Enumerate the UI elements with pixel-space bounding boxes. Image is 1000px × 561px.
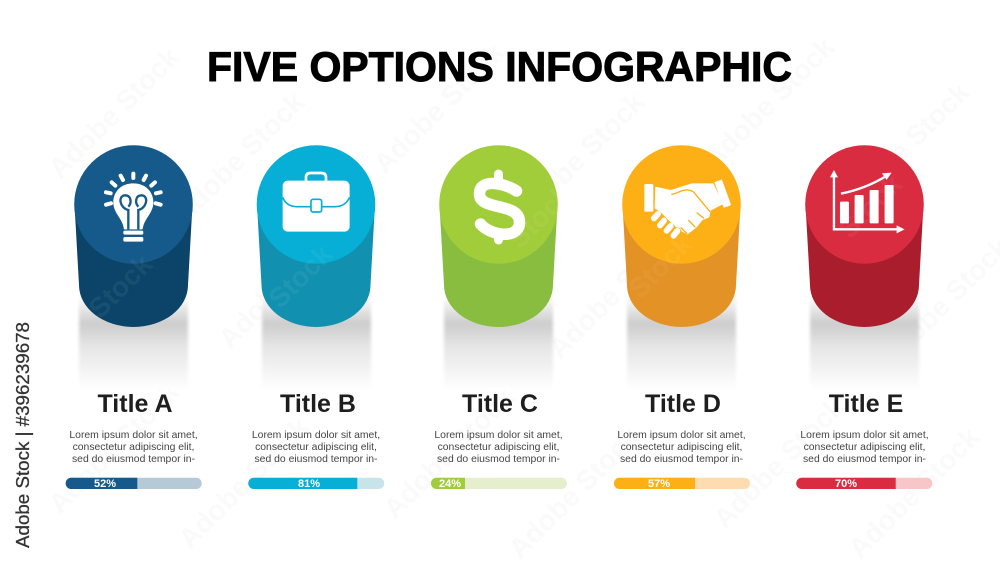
text C: consectetur adipiscing elit, (438, 442, 559, 453)
cylinder B (257, 145, 375, 327)
foreground watermark over cylinders (82, 168, 908, 324)
foreground watermark over cylinders: Stock (262, 238, 338, 314)
progress bar B 81%: 81% (298, 478, 320, 490)
text B: Lorem ipsum dolor sit amet, (252, 430, 380, 441)
progress bar D 57%: 57% (648, 478, 670, 490)
progress bar C 24%: 24% (439, 478, 461, 490)
progress bar B 81% (248, 478, 384, 490)
background watermark pattern: Adobe Stock (507, 86, 651, 229)
progress bar D 57% (614, 478, 750, 490)
progress bar E 70%: 70% (835, 478, 857, 490)
foreground watermark over cylinders: Stock (502, 178, 578, 254)
cylinder shadow E (810, 295, 919, 390)
text D: consectetur adipiscing elit, (621, 442, 742, 453)
background watermark pattern: Adobe Stock (832, 76, 976, 219)
heading C: Title C (462, 390, 538, 418)
cylinder shadow B (262, 295, 371, 390)
foreground watermark over cylinders: Stock (82, 248, 158, 324)
text A: Lorem ipsum dolor sit amet, (69, 430, 198, 441)
option A column (66, 145, 202, 490)
progress bar A 52% (66, 478, 202, 490)
text D: sed do eiusmod tempor in- (620, 454, 743, 465)
icon: growth chart (830, 170, 905, 233)
foreground watermark over cylinders: Stock (622, 228, 698, 304)
option B column (248, 145, 384, 490)
icon: handshake (644, 179, 731, 236)
cylinder C (439, 145, 558, 327)
text C: sed do eiusmod tempor in- (437, 454, 560, 465)
text E: consectetur adipiscing elit, (804, 442, 925, 453)
icon: light bulb (106, 174, 161, 242)
progress bar A 52%: 52% (94, 478, 116, 490)
icon: briefcase (283, 173, 350, 232)
background watermark pattern: Adobe Stock (842, 421, 986, 561)
option C column (431, 145, 567, 490)
background watermark pattern: Adobe Stock (502, 421, 646, 561)
text E: Lorem ipsum dolor sit amet, (800, 430, 929, 441)
text C (434, 430, 563, 465)
background watermark pattern: Adobe Stock (542, 221, 686, 364)
background watermark pattern: Adobe Stock (367, 36, 511, 179)
text B: sed do eiusmod tempor in- (254, 454, 378, 465)
text D (617, 430, 746, 465)
option E column (796, 145, 932, 490)
text D: Lorem ipsum dolor sit amet, (617, 430, 746, 441)
option D column (614, 145, 750, 490)
cylinder shadow D (627, 295, 736, 390)
foreground watermark over cylinders: Stock (832, 168, 908, 244)
text B: consectetur adipiscing elit, (255, 442, 377, 453)
text E: sed do eiusmod tempor in- (803, 454, 926, 465)
cylinder E (805, 145, 924, 327)
text E (800, 430, 929, 465)
background watermark pattern: Adobe Stock (377, 381, 521, 524)
text C: Lorem ipsum dolor sit amet, (434, 430, 563, 441)
heading A: Title A (97, 390, 173, 418)
heading D: Title D (645, 390, 721, 418)
heading E: Title E (829, 390, 903, 418)
background watermark pattern: Adobe Stock (707, 391, 851, 534)
side credit: Adobe Stock number: Adobe Stock | #396239678 (12, 322, 33, 548)
background watermark pattern: Adobe Stock (212, 211, 356, 354)
background watermark pattern: Adobe Stock (42, 376, 186, 519)
text A (69, 430, 198, 465)
background watermark pattern: Adobe Stock (167, 86, 311, 229)
text A: consectetur adipiscing elit, (73, 442, 194, 453)
background watermark pattern: Adobe Stock (697, 31, 841, 174)
background watermark pattern: Adobe Stock (172, 411, 316, 554)
title: FIVE OPTIONS INFOGRAPHIC (207, 43, 792, 90)
cylinder A (74, 145, 193, 327)
progress bar C 24% (431, 478, 567, 490)
heading B: Title B (280, 390, 356, 418)
background watermark pattern: Adobe Stock (42, 41, 186, 184)
cylinder shadow A (79, 295, 188, 390)
text B (252, 430, 380, 465)
text A: sed do eiusmod tempor in- (72, 454, 195, 465)
progress bar E 70% (796, 478, 932, 490)
cylinder D (622, 145, 741, 327)
cylinder shadow C (444, 295, 553, 390)
icon: dollar sign (480, 174, 520, 240)
